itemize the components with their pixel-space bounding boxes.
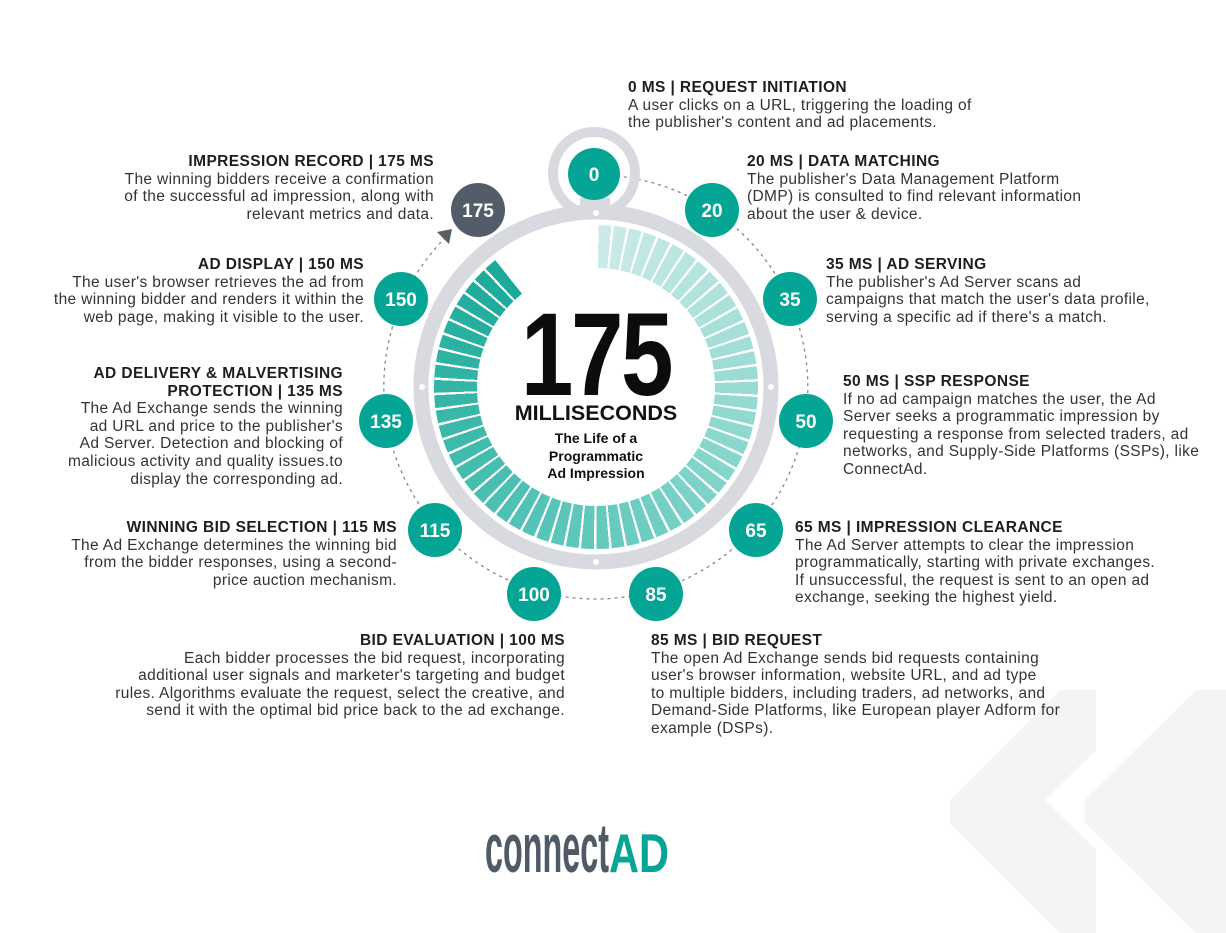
progress segments [434,225,758,549]
marker 115: 115 [420,521,451,542]
logo [485,820,669,880]
text: ad delivery: malicious activity and quality issues.to [68,453,343,470]
text: impression clearance: programmatically, starting with private exchanges. [795,554,1155,571]
text: impression clearance: 65 MS | IMPRESSION CLEARANCE [795,519,1063,536]
text: ad serving: serving a specific ad if there's a match. [826,309,1107,326]
text: bid request [651,632,1060,737]
marker 35 [763,272,817,326]
text: impression clearance: exchange, seeking the highest yield. [795,589,1058,606]
marker 85: 85 [645,585,667,606]
text: bid request: to multiple bidders, including traders, ad networks, and [651,685,1045,702]
marker 50 [779,394,833,448]
marker 0 [568,148,620,200]
marker 65: 65 [745,521,767,542]
text: request initiation: 0 MS | REQUEST INITIATION [628,79,847,96]
text: ad delivery: ad URL and price to the publisher's [90,418,343,435]
center title [515,289,677,481]
text: data matching [747,153,1081,223]
center title: Ad Impression [547,465,645,481]
text: ad display: AD DISPLAY | 150 MS [198,256,364,273]
text: ssp response: requesting a response from selected traders, ad [843,426,1189,443]
text: impression clearance: If unsuccessful, the request is sent to an open ad [795,572,1149,589]
marker 135 [359,394,413,448]
text: ssp response: Server seeks a programmatic impression by [843,408,1160,425]
text: ad delivery [68,365,343,488]
text: winning bid selection: from the bidder responses, using a second- [84,554,397,571]
text: bid evaluation [115,632,565,719]
marker 20 [685,183,739,237]
marker 0: 0 [589,165,599,186]
text: impression clearance: The Ad Server attempts to clear the impression [795,537,1134,554]
text: bid evaluation: Each bidder processes the bid request, incorporating [184,650,565,667]
text: impression clearance [795,519,1155,606]
text: request initiation: A user clicks on a URL, triggering the loading of [628,97,972,114]
text: bid request: Demand-Side Platforms, like European player Adform for [651,702,1060,719]
text: winning bid selection: The Ad Exchange determines the winning bid [71,537,397,554]
text: data matching: The publisher's Data Management Platform [747,171,1059,188]
center title: MILLISECONDS [515,401,677,425]
text: ad serving [826,256,1150,326]
text: bid evaluation: rules. Algorithms evaluate the request, select the creative, and [115,685,565,702]
text: ad delivery: AD DELIVERY & MALVERTISING [93,365,343,382]
arrow head [437,229,452,244]
text: ad delivery: PROTECTION | 135 MS [167,383,343,400]
text: ad delivery: The Ad Exchange sends the winning [81,400,343,417]
center title: Programmatic [549,448,643,464]
marker 50: 50 [795,412,817,433]
text: bid request: 85 MS | BID REQUEST [651,632,822,649]
marker 85 [629,567,683,621]
text: winning bid selection: price auction mechanism. [213,572,397,589]
text: ssp response: networks, and Supply-Side Platforms (SSPs), like [843,443,1199,460]
text: ad serving: 35 MS | AD SERVING [826,256,987,273]
text: winning bid selection: WINNING BID SELECTION | 115 MS [127,519,397,536]
text: ad display [54,256,364,326]
text: bid evaluation: send it with the optimal bid price back to the ad exchange. [146,702,565,719]
text: ad delivery: display the corresponding ad. [130,471,343,488]
text: impression record: of the successful ad impression, along with [124,188,434,205]
text: bid request: example (DSPs). [651,720,773,737]
text: ssp response: 50 MS | SSP RESPONSE [843,373,1030,390]
marker 35: 35 [779,290,801,311]
text: bid request: user's browser information, website URL, and ad type [651,667,1037,684]
marker 175 [451,183,505,237]
marker 175: 175 [462,201,494,222]
marker 115 [408,503,462,557]
text: impression record: IMPRESSION RECORD | 175 MS [188,153,434,170]
text: impression record [124,153,434,223]
text: request initiation [628,79,972,131]
marker 100 [507,567,561,621]
text: data matching: (DMP) is consulted to find relevant information [747,188,1081,205]
marker 135: 135 [370,412,402,433]
text: ssp response: ConnectAd. [843,461,928,478]
marker 100: 100 [518,585,550,606]
text: request initiation: the publisher's content and ad placements. [628,114,937,131]
dashed timeline arc [384,175,808,599]
text: ad serving: campaigns that match the user's data profile, [826,291,1150,308]
text: bid evaluation: BID EVALUATION | 100 MS [360,632,565,649]
text: bid evaluation: additional user signals and marketer's targeting and budget [138,667,565,684]
marker 150 [374,272,428,326]
text: impression record: The winning bidders receive a confirmation [125,171,434,188]
text: ssp response [843,373,1199,478]
text: ad display: the winning bidder and renders it within the [54,291,364,308]
stopwatch ring [419,210,774,565]
text: ssp response: If no ad campaign matches the user, the Ad [843,391,1156,408]
text: ad display: web page, making it visible to the user. [84,309,364,326]
marker 20: 20 [701,201,723,222]
text: impression record: relevant metrics and data. [247,206,434,223]
stopwatch crown [553,132,635,214]
text: winning bid selection [71,519,397,589]
text: ad display: The user's browser retrieves the ad from [72,274,364,291]
text: data matching: 20 MS | DATA MATCHING [747,153,940,170]
center title: 175 [521,289,671,421]
marker 150: 150 [385,290,417,311]
text: data matching: about the user & device. [747,206,923,223]
text: ad delivery: Ad Server. Detection and blocking of [80,435,343,452]
center title: The Life of a [555,430,637,446]
text: bid request: The open Ad Exchange sends bid requests containing [651,650,1039,667]
text: ad serving: The publisher's Ad Server scans ad [826,274,1081,291]
marker 65 [729,503,783,557]
